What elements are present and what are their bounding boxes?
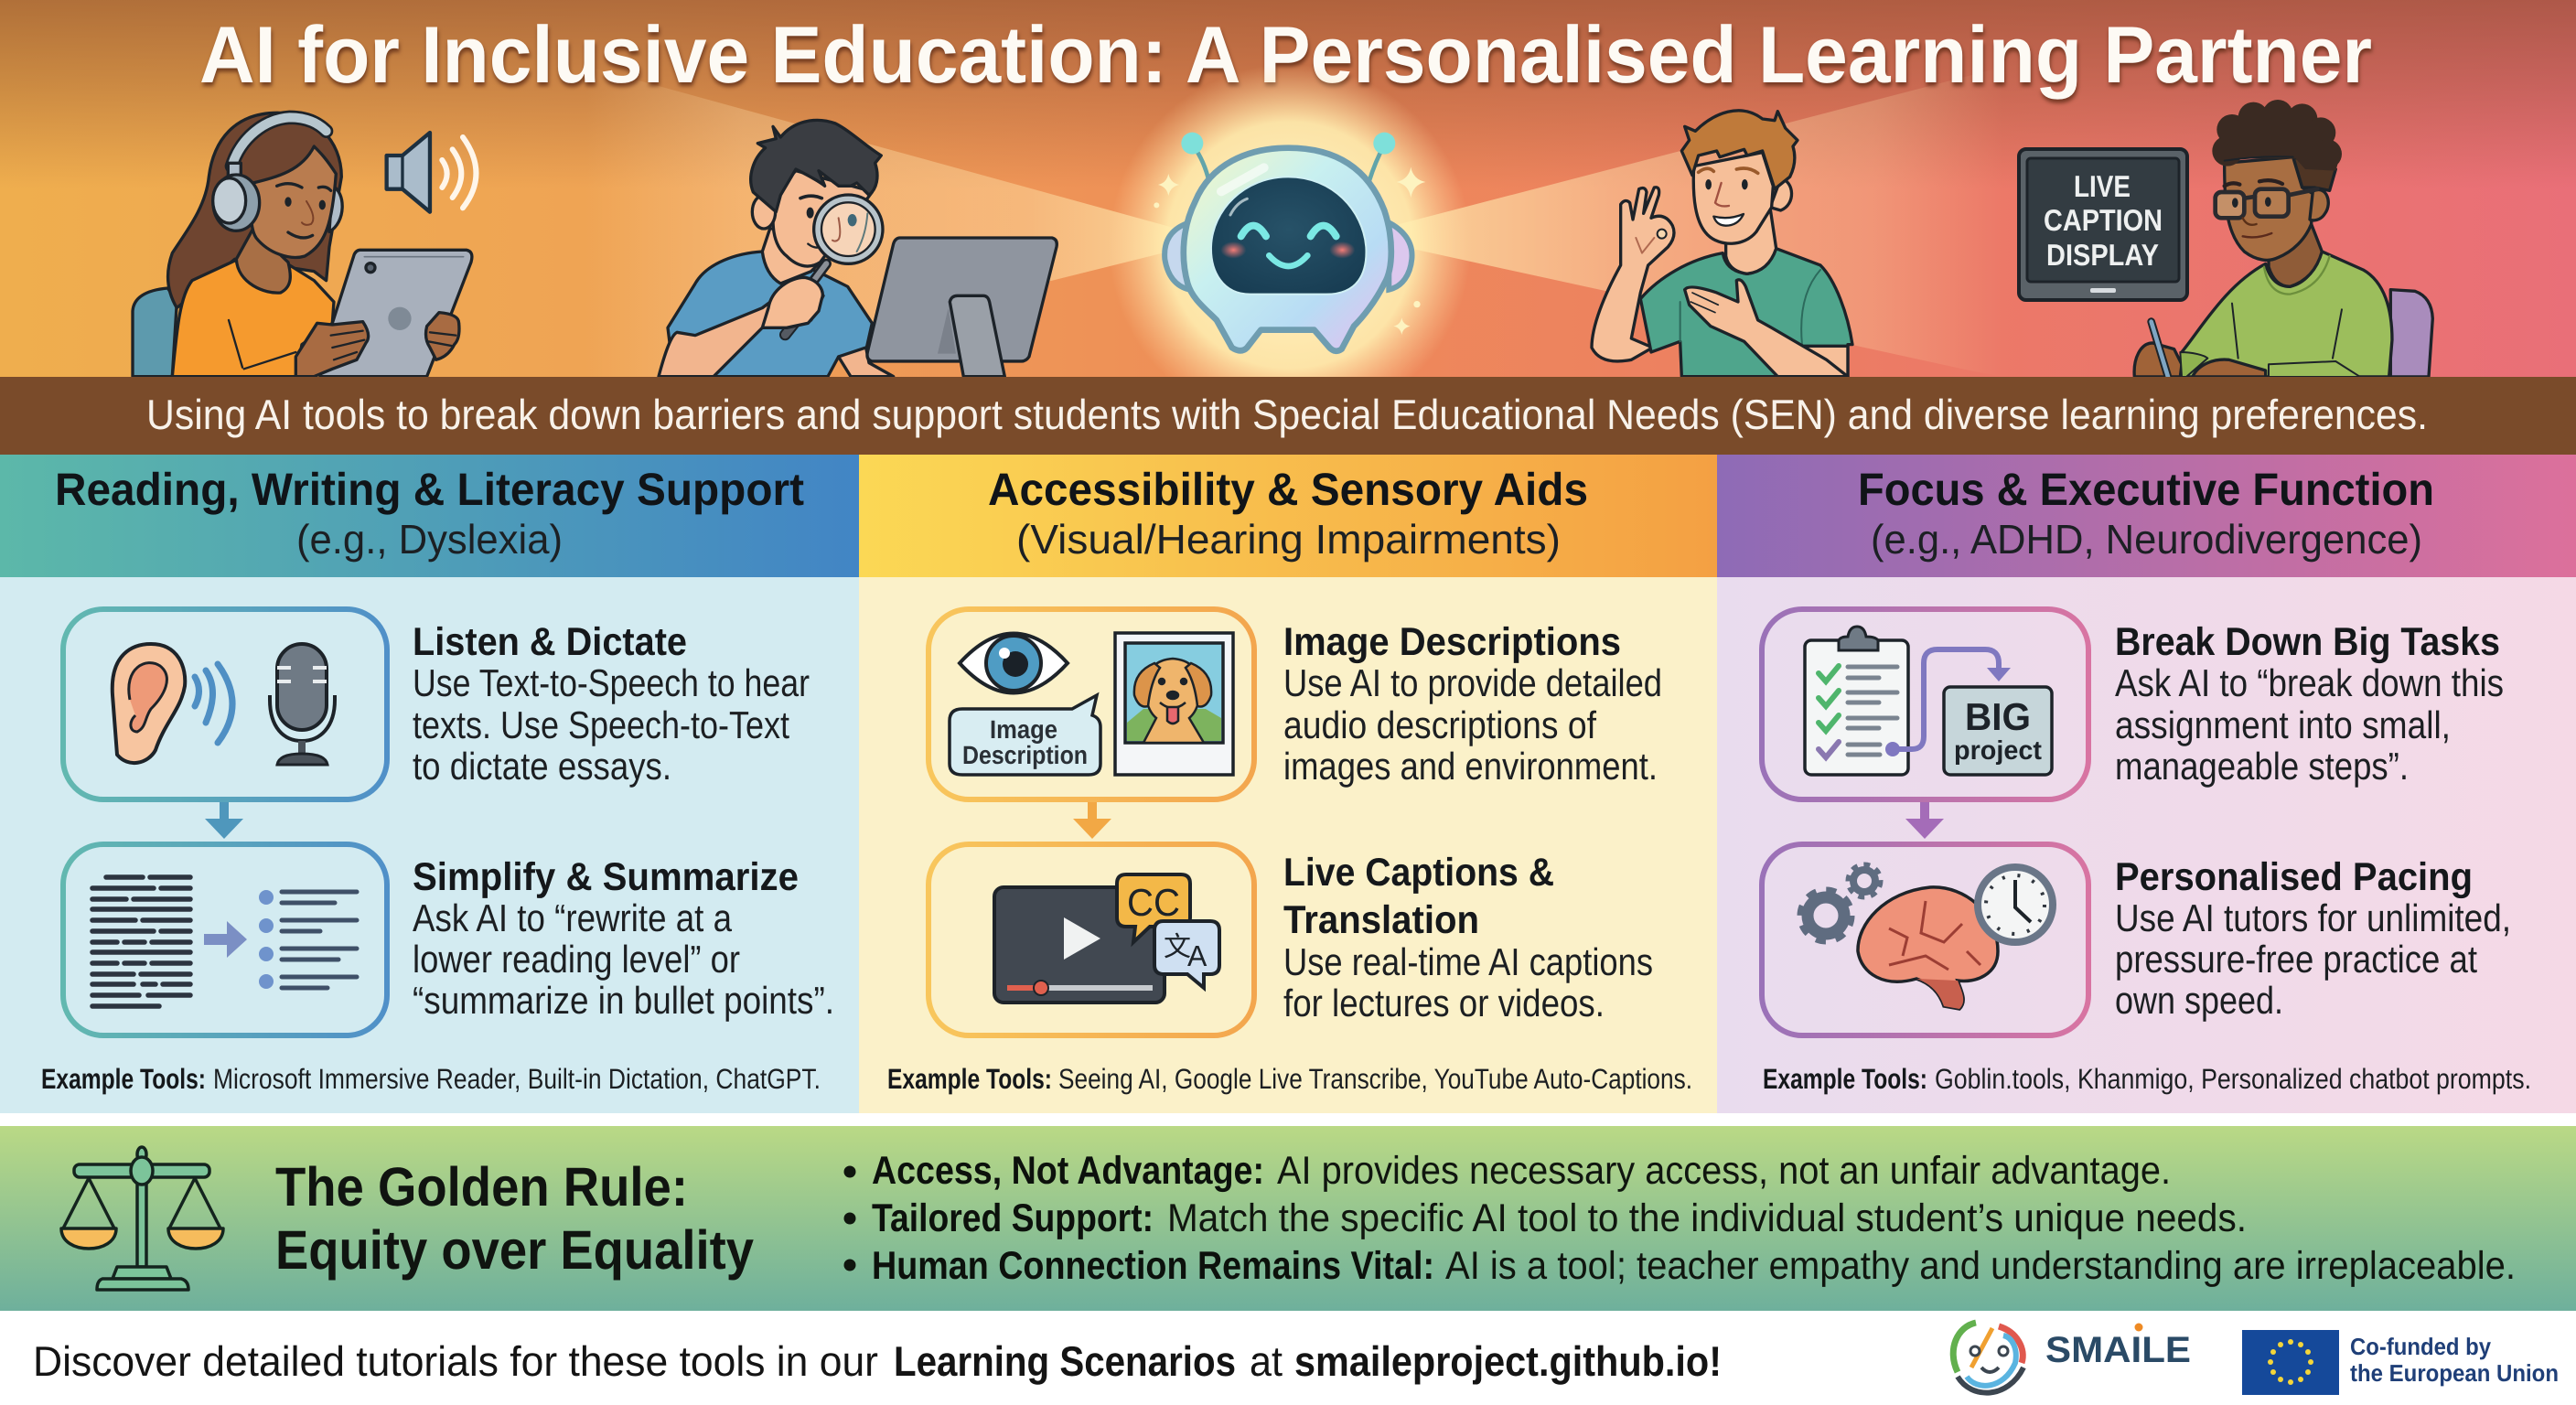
heading: focus column: Focus & Executive Function xyxy=(1858,464,2434,515)
text: image descriptions: audio descriptions of xyxy=(1283,703,1596,746)
text: listen and dictate: texts. Use Speech-to-Text xyxy=(413,703,789,746)
example tools: literacy: Microsoft Immersive Reader, Built-in Dictation, ChatGPT. xyxy=(213,1063,821,1095)
text: break down big tasks: Ask AI to “break down this xyxy=(2115,661,2504,704)
panel: golden rule band xyxy=(0,1126,2576,1311)
text: personalised pacing: Personalised Pacing xyxy=(2115,855,2473,899)
icon: live caption display xyxy=(2019,149,2187,300)
text: personalised pacing: own speed. xyxy=(2115,979,2283,1022)
subheading: ADHD: (e.g., ADHD, Neurodivergence) xyxy=(1871,516,2422,563)
example tools: focus: Example Tools: xyxy=(1763,1063,1927,1095)
card: gears, brain and clock xyxy=(1762,844,2088,1035)
card: checklist and big project: project xyxy=(1954,736,2042,766)
bullet: access, not advantage: Access, Not Advantage: xyxy=(872,1149,1264,1193)
heading: the golden rule: Equity over Equality xyxy=(275,1219,755,1281)
text: break down big tasks: manageable steps”. xyxy=(2115,745,2409,788)
subtitle band: Using AI tools to break down barriers and support students with Special Educational Needs (SEN) and diverse learning preferences. xyxy=(146,391,2428,438)
logo: SMAILE: SMAILE xyxy=(2045,1330,2191,1370)
text: personalised pacing xyxy=(2115,855,2511,1022)
text: simplify and summarize xyxy=(413,855,834,1022)
text: simplify and summarize: lower reading level” or xyxy=(413,938,740,981)
footer call to action: at xyxy=(1250,1337,1283,1385)
logo: co-funded by the European Union xyxy=(2242,1330,2559,1395)
footer call to action: Discover detailed tutorials for these tools in our xyxy=(33,1337,878,1385)
icon: live caption display: DISPLAY xyxy=(2046,238,2159,272)
card: checklist and big project: BIG xyxy=(1965,695,2031,738)
text: break down big tasks: Break Down Big Tasks xyxy=(2115,620,2500,664)
bullet: access, not advantage: AI provides necessary access, not an unfair advantage. xyxy=(1277,1149,2171,1193)
icon: dog xyxy=(1134,659,1211,743)
logo: co-funded by the European Union: the European Union xyxy=(2350,1359,2559,1387)
illustration: AI robot companion xyxy=(1109,64,1471,426)
illustration: boy with magnifying glass and monitor xyxy=(659,120,1057,377)
card: eye, description and dog photo: Description xyxy=(962,741,1088,769)
example tools: accessibility: Example Tools: xyxy=(887,1063,1052,1095)
text: live captions and translation xyxy=(1283,851,1653,1024)
text: image descriptions xyxy=(1283,620,1662,788)
logo: SMAILE xyxy=(1953,1323,2191,1393)
text: image descriptions: Image Descriptions xyxy=(1283,620,1621,664)
arrow: literacy flow xyxy=(205,802,243,839)
icon: live caption display: LIVE xyxy=(2074,169,2131,203)
card: checklist and big project xyxy=(1762,609,2088,799)
card: ear and microphone icon xyxy=(63,609,387,799)
panel: focus and executive function xyxy=(1717,455,2576,1113)
card: simplify text icon xyxy=(63,844,387,1035)
text: simplify and summarize: “summarize in bullet points”. xyxy=(413,979,834,1022)
card: video with captions and translation: A xyxy=(1187,939,1208,972)
text: listen and dictate xyxy=(413,620,810,788)
bullet: tailored support: Match the specific AI tool to the individual student’s unique needs. xyxy=(1167,1196,2247,1240)
bullet: tailored support: Tailored Support: xyxy=(872,1196,1154,1240)
heading: literacy column: Reading, Writing & Literacy Support xyxy=(55,464,804,515)
footer call to action: Learning Scenarios xyxy=(894,1337,1236,1385)
text: image descriptions: Use AI to provide detailed xyxy=(1283,661,1662,704)
card: eye, description and dog photo: Image xyxy=(990,715,1057,744)
card: eye, description and dog photo xyxy=(928,609,1254,799)
text: break down big tasks: assignment into small, xyxy=(2115,703,2451,746)
arrow: focus flow xyxy=(1905,802,1944,839)
subheading: impairments: (Visual/Hearing Impairments) xyxy=(1016,516,1561,563)
text: live captions and translation: for lectures or videos. xyxy=(1283,981,1605,1024)
subtitle band xyxy=(0,377,2576,455)
text: simplify and summarize: Ask AI to “rewrite at a xyxy=(413,896,733,939)
text: listen and dictate: Listen & Dictate xyxy=(413,620,687,664)
subheading: dyslexia: (e.g., Dyslexia) xyxy=(296,516,563,563)
illustration: girl with headphones and tablet xyxy=(133,113,472,377)
card: video with captions and translation: CC xyxy=(1127,881,1180,924)
example tools: literacy xyxy=(41,1063,821,1095)
example tools: accessibility xyxy=(887,1063,1692,1095)
text: break down big tasks xyxy=(2115,620,2504,788)
text: live captions and translation: Live Captions & xyxy=(1283,851,1554,895)
bullet: human connection: AI is a tool; teacher empathy and understanding are irreplaceable. xyxy=(1445,1244,2516,1288)
footer call to action: smaileproject.github.io! xyxy=(1294,1337,1722,1385)
panel: accessibility and sensory aids xyxy=(859,455,1717,1113)
example tools: literacy: Example Tools: xyxy=(41,1063,206,1095)
icon: speaker with sound waves xyxy=(387,133,476,212)
text: simplify and summarize: Simplify & Summarize xyxy=(413,855,799,899)
bullet: access, not advantage xyxy=(843,1149,2171,1193)
card: video with captions and translation xyxy=(928,844,1254,1035)
text: live captions and translation: Use real-time AI captions xyxy=(1283,940,1653,983)
bullet: human connection: Human Connection Remains Vital: xyxy=(872,1244,1434,1288)
card: video with captions and translation: 文 xyxy=(1164,932,1191,962)
text: listen and dictate: Use Text-to-Speech to hear xyxy=(413,661,810,704)
panel: reading, writing and literacy support xyxy=(0,455,859,1113)
arrow: accessibility flow xyxy=(1073,802,1111,839)
text: personalised pacing: Use AI tutors for unlimited, xyxy=(2115,896,2511,939)
panel: hero header xyxy=(0,0,2576,426)
bullet: human connection xyxy=(843,1244,2516,1288)
icon: sparkles xyxy=(1154,167,1425,335)
heading: the golden rule xyxy=(275,1156,755,1281)
footer call to action xyxy=(33,1337,1722,1385)
text: image descriptions: images and environment. xyxy=(1283,745,1658,788)
text: listen and dictate: to dictate essays. xyxy=(413,745,671,788)
text: personalised pacing: pressure-free practice at xyxy=(2115,938,2477,981)
heading: the golden rule: The Golden Rule: xyxy=(275,1156,688,1217)
illustration: student with glasses taking notes xyxy=(2134,100,2432,377)
text: live captions and translation: Translation xyxy=(1283,898,1479,942)
icon: balance scales xyxy=(61,1147,223,1290)
illustration: boy using sign language xyxy=(1592,111,1852,377)
heading: accessibility column: Accessibility & Sensory Aids xyxy=(988,464,1588,515)
title: AI for Inclusive Education: A Personalised Learning Partner xyxy=(199,9,2372,100)
example tools: accessibility: Seeing AI, Google Live Transcribe, YouTube Auto-Captions. xyxy=(1058,1063,1692,1095)
logo: co-funded by the European Union: Co-funded by xyxy=(2350,1333,2491,1360)
icon: live caption display: CAPTION xyxy=(2044,203,2163,237)
